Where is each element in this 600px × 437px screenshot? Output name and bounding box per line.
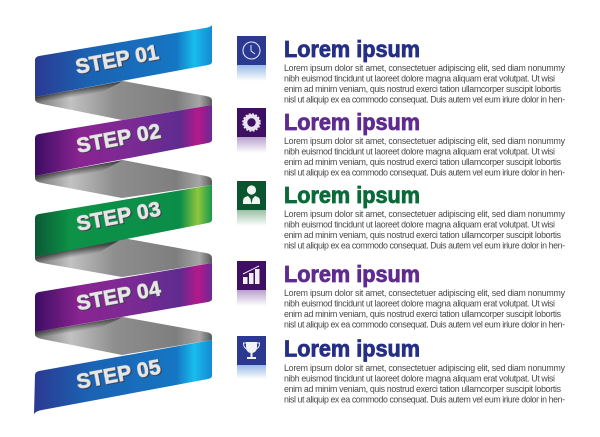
text block 2: enim ad minim veniam, quis nostrud exerci tation ullamcorper suscipit lobortis <box>284 157 562 167</box>
heading 5: Lorem ipsum <box>284 336 420 362</box>
icon: bar chart <box>237 261 266 306</box>
ribbon connector: gray fold 2 <box>35 160 212 198</box>
text block 1: Lorem ipsum dolor sit amet, consectetuer adipiscing elit, sed diam nonummy <box>284 63 566 73</box>
ribbon connector: gray fold 3 <box>35 238 212 277</box>
ribbon: step 03 <box>35 185 212 257</box>
icon: clock <box>237 36 266 81</box>
heading 3: Lorem ipsum <box>284 182 420 208</box>
text block 4: Lorem ipsum dolor sit amet, consectetuer adipiscing elit, sed diam nonummy <box>284 288 566 298</box>
text block 5: nibh euismod tincidunt ut laoreet dolore magna aliquam erat volutpat. Ut wisi <box>284 374 555 384</box>
text block 4: enim ad minim veniam, quis nostrud exerci tation ullamcorper suscipit lobortis <box>284 309 562 319</box>
text block 4: nisl ut aliquip ex ea commodo consequat. Duis autem vel eum iriure dolor in hen- <box>284 320 565 330</box>
text block 1 <box>284 63 566 104</box>
ribbon: step 05 <box>34 340 212 414</box>
heading 1: Lorem ipsum <box>284 36 420 62</box>
icon: trophy <box>237 336 266 379</box>
label: step 05: STEP 05 <box>75 356 163 394</box>
ribbon: step 01 <box>35 25 212 97</box>
text block 3: nisl ut aliquip ex ea commodo consequat. Duis autem vel eum iriure dolor in hen- <box>284 240 565 250</box>
ribbon connector: gray fold 1 <box>35 81 212 120</box>
label: step 03: STEP 03 <box>75 198 162 236</box>
text block 2: nibh euismod tincidunt ut laoreet dolore magna aliquam erat volutpat. Ut wisi <box>284 146 555 156</box>
heading 2: Lorem ipsum <box>284 109 420 135</box>
icon: person <box>237 181 266 226</box>
text block 5: Lorem ipsum dolor sit amet, consectetuer adipiscing elit, sed diam nonummy <box>284 363 566 373</box>
icon: gear <box>237 108 266 153</box>
heading 4: Lorem ipsum <box>284 261 420 287</box>
text block 5: enim ad minim veniam, quis nostrud exerci tation ullamcorper suscipit lobortis <box>284 384 562 394</box>
ribbon connector: gray fold 4 <box>35 317 212 355</box>
ribbon: step 04 <box>35 263 212 332</box>
ribbon: step 02 <box>35 105 212 176</box>
text block 4: nibh euismod tincidunt ut laoreet dolore magna aliquam erat volutpat. Ut wisi <box>284 298 555 308</box>
text block 3: enim ad minim veniam, quis nostrud exerci tation ullamcorper suscipit lobortis <box>284 230 562 240</box>
text block 1: nisl ut aliquip ex ea commodo consequat. Duis autem vel eum iriure dolor in hen- <box>284 94 565 104</box>
text block 4 <box>284 288 566 330</box>
text block 3: Lorem ipsum dolor sit amet, consectetuer adipiscing elit, sed diam nonummy <box>284 209 566 219</box>
text block 3: nibh euismod tincidunt ut laoreet dolore magna aliquam erat volutpat. Ut wisi <box>284 220 555 230</box>
text block 5 <box>284 363 566 404</box>
label: step 02: STEP 02 <box>75 120 162 158</box>
text block 1: enim ad minim veniam, quis nostrud exerci tation ullamcorper suscipit lobortis <box>284 84 562 94</box>
text block 5: nisl ut aliquip ex ea commodo consequat. Duis autem vel eum iriure dolor in hen- <box>284 394 565 404</box>
text block 3 <box>284 209 566 250</box>
text block 1: nibh euismod tincidunt ut laoreet dolore magna aliquam erat volutpat. Ut wisi <box>284 74 555 84</box>
text block 2: Lorem ipsum dolor sit amet, consectetuer adipiscing elit, sed diam nonummy <box>284 136 566 146</box>
text block 2: nisl ut aliquip ex ea commodo consequat. Duis autem vel eum iriure dolor in hen- <box>284 168 565 178</box>
label: step 04: STEP 04 <box>75 277 163 315</box>
label: step 01: STEP 01 <box>74 41 161 79</box>
text block 2 <box>284 136 566 178</box>
